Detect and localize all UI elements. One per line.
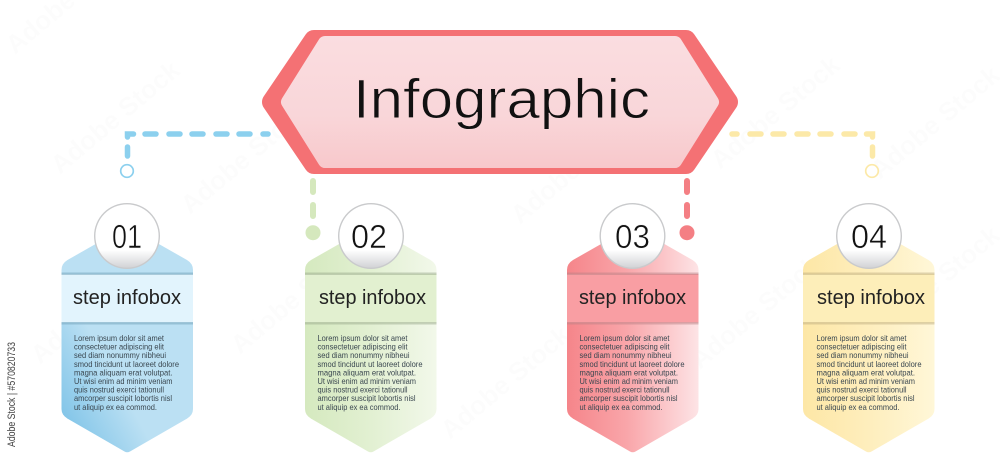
- text block: Ut wisi enim ad minim veniam: [74, 376, 172, 386]
- number badge 02: 02: [351, 218, 387, 255]
- connector: green dashed line to dot: [306, 181, 320, 240]
- text block: smod tincidunt ut laoreet dolore: [816, 359, 922, 369]
- text block: [816, 333, 922, 412]
- watermark: Adobe Stock: [45, 54, 186, 180]
- text block: smod tincidunt ut laoreet dolore: [74, 359, 179, 369]
- number badge 02: [338, 203, 404, 269]
- heading: step infobox: step infobox: [579, 286, 687, 309]
- text block: Lorem ipsum dolor sit amet: [816, 333, 907, 343]
- text block: ut aliquip ex ea commod.: [580, 402, 662, 412]
- watermark: Adobe Stock: [225, 234, 366, 360]
- side credit: Adobe Stock | #570820733: [6, 342, 18, 447]
- text block: consectetuer adipiscing elit: [318, 342, 408, 352]
- number badge 03: [600, 203, 666, 269]
- title: Infographic: [353, 67, 650, 130]
- text block: quis nostrud exerci tationull: [580, 385, 670, 395]
- text block: magna aliquam erat volutpat.: [318, 367, 416, 377]
- text block: amcorper suscipit lobortis nisl: [74, 393, 172, 403]
- text block: ut aliquip ex ea commod.: [816, 402, 900, 412]
- text block: Ut wisi enim ad minim veniam: [816, 376, 915, 386]
- text block: [580, 333, 685, 412]
- text block: sed diam nonummy nibheui: [74, 350, 166, 360]
- text block: sed diam nonummy nibheui: [318, 350, 410, 360]
- number badge 03: 03: [615, 218, 650, 255]
- text block: ut aliquip ex ea commod.: [74, 402, 157, 412]
- heading: step infobox: step infobox: [73, 286, 182, 309]
- panel: step 01: [62, 203, 193, 452]
- text block: quis nostrud exerci tationull: [74, 385, 164, 395]
- text block: magna aliquam erat volutpat.: [74, 367, 172, 377]
- text block: Lorem ipsum dolor sit amet: [580, 333, 670, 343]
- watermark: Adobe Stock: [25, 244, 166, 370]
- text block: magna aliquam erat volutpat.: [580, 367, 678, 377]
- number badge 04: [836, 203, 902, 269]
- text block: amcorper suscipit lobortis nisl: [318, 393, 416, 403]
- text block: Lorem ipsum dolor sit amet: [318, 333, 408, 343]
- connector: yellow dashed line to circle: [732, 134, 878, 177]
- text block: ut aliquip ex ea commod.: [318, 402, 400, 412]
- connector: blue dashed line to circle: [121, 134, 268, 177]
- text block: quis nostrud exerci tationull: [816, 385, 907, 395]
- text block: consectetuer adipiscing elit: [580, 342, 670, 352]
- text block: sed diam nonummy nibheui: [816, 350, 909, 360]
- text block: smod tincidunt ut laoreet dolore: [318, 359, 423, 369]
- text block: consectetuer adipiscing elit: [816, 342, 907, 352]
- heading: step infobox: step infobox: [319, 286, 427, 309]
- watermark: Adobe Stock: [685, 249, 826, 375]
- text block: [74, 333, 179, 412]
- text block: [318, 333, 423, 412]
- text block: Ut wisi enim ad minim veniam: [580, 376, 678, 386]
- watermark: Adobe Stock: [175, 94, 316, 220]
- watermark: Adobe Stock: [435, 319, 576, 445]
- number badge 01: [94, 203, 160, 269]
- panel: step 04: [803, 203, 934, 452]
- text block: sed diam nonummy nibheui: [580, 350, 672, 360]
- number badge 04: 04: [851, 218, 887, 255]
- text block: consectetuer adipiscing elit: [74, 342, 165, 352]
- text block: amcorper suscipit lobortis nisl: [816, 393, 915, 403]
- text block: smod tincidunt ut laoreet dolore: [580, 359, 685, 369]
- panel: step 02: [305, 203, 436, 452]
- text block: quis nostrud exerci tationull: [318, 385, 408, 395]
- heading: step infobox: step infobox: [817, 286, 926, 309]
- watermark: Adobe Stock: [505, 104, 646, 230]
- watermark: Adobe Stock: [375, 49, 516, 175]
- number badge 01: 01: [112, 218, 142, 255]
- panel: step 03: [567, 203, 698, 452]
- watermark: Adobe Stock: [705, 49, 846, 175]
- text block: amcorper suscipit lobortis nisl: [580, 393, 678, 403]
- text block: Lorem ipsum dolor sit amet: [74, 333, 165, 343]
- connector: red dashed line to dot: [680, 181, 694, 240]
- title banner: [272, 40, 728, 164]
- text block: Ut wisi enim ad minim veniam: [318, 376, 416, 386]
- text block: magna aliquam erat volutpat.: [816, 367, 915, 377]
